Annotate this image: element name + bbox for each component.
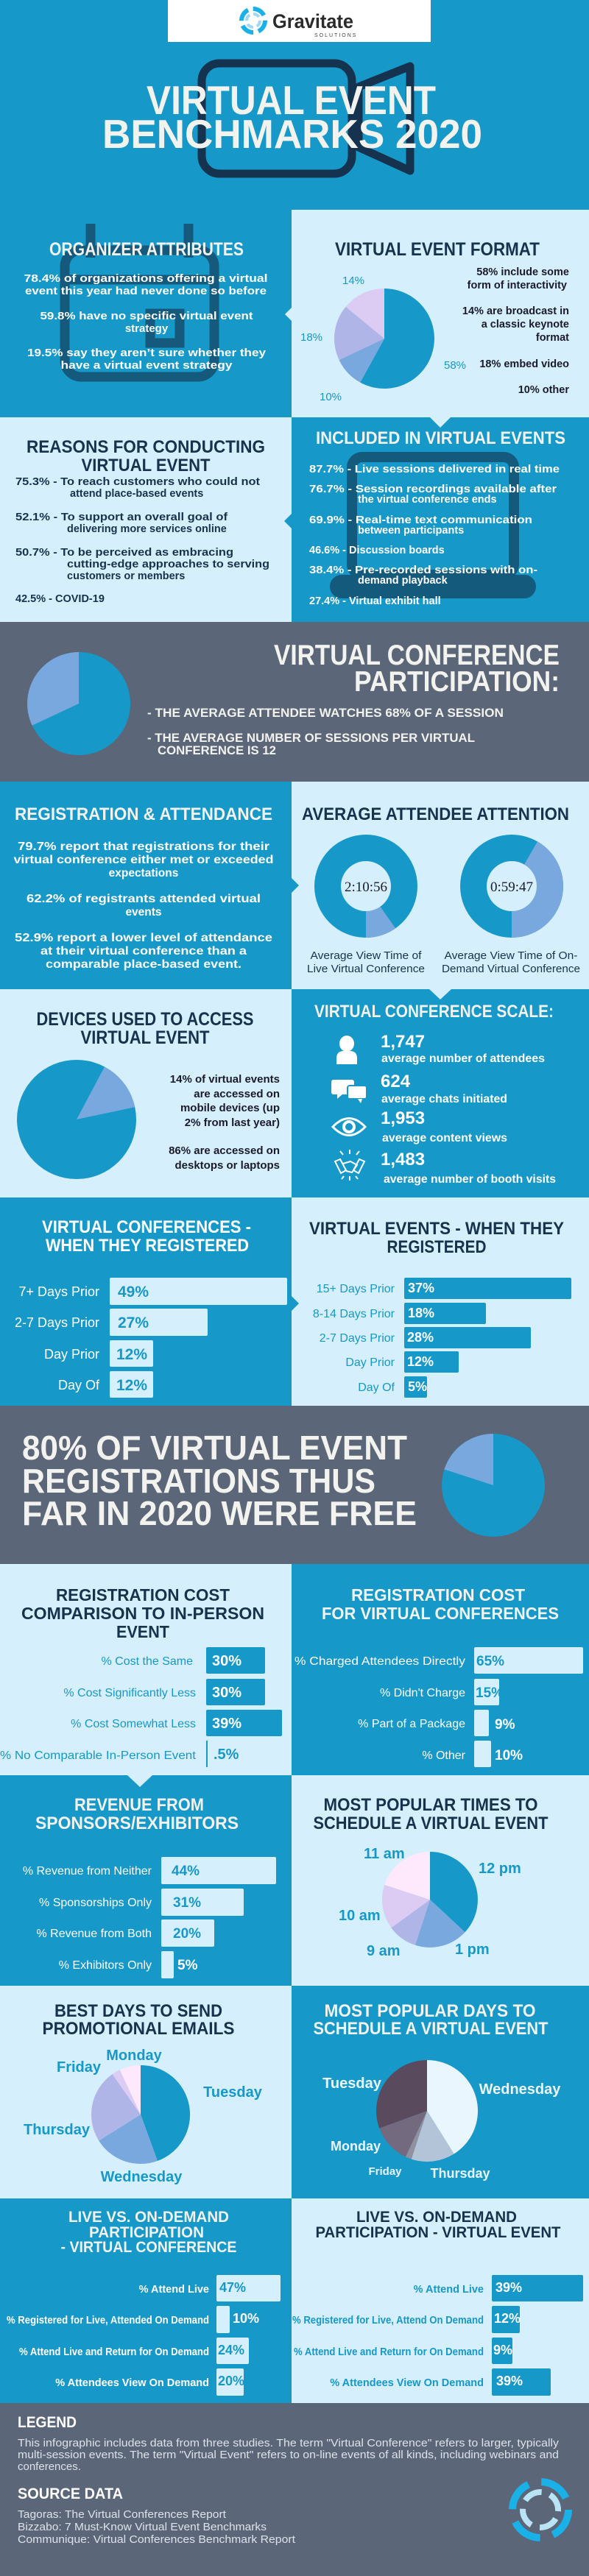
panel: average attendee attention: Demand Virtual Conference <box>442 963 580 975</box>
panel: organizer attributes: strategy <box>125 322 169 335</box>
bar chart: % Attendees View On Demand <box>330 2377 484 2389</box>
bar chart: 2-7 Days Prior <box>320 1332 395 1345</box>
panel: legend <box>18 2414 560 2473</box>
bar chart: % Registered for Live, Attend On Demand <box>292 2315 484 2326</box>
panel: source data: Communique: Virtual Conferences Benchmark Report <box>18 2533 296 2546</box>
bar chart: 10% <box>495 1748 523 1763</box>
panel: registration & attendance: REGISTRATION & ATTENDANCE <box>15 804 272 824</box>
donut: live <box>314 835 417 938</box>
title <box>102 77 482 157</box>
bar chart: 30% <box>212 1685 241 1701</box>
bar chart: % Exhibitors Only <box>59 1959 152 1972</box>
panel: live vs on-demand conference: LIVE VS. ON-DEMAND <box>68 2209 229 2226</box>
bar chart: % Registered for Live, Attended On Demand <box>7 2315 209 2326</box>
icon: laptop <box>335 457 531 593</box>
panel: reasons for conducting: 75.3% - To reach customers who could not <box>15 476 260 488</box>
panel: reasons for conducting: attend place-based events <box>70 488 203 500</box>
panel: live vs on-demand event: LIVE VS. ON-DEMAND <box>356 2209 517 2226</box>
panel: registration & attendance: comparable place-based event. <box>46 958 241 971</box>
bar chart: % Attend Live and Return for On Demand <box>294 2346 484 2358</box>
panel: virtual conference scale <box>314 1002 556 1186</box>
panel: virtual event format: form of interactivity <box>468 280 567 291</box>
bar chart: 9% <box>493 2343 512 2357</box>
panel: virtual conference scale: 1,747 <box>381 1032 425 1052</box>
panel: legend: This infographic includes data from three studies. The term "Virtual Conference" refers to larger, typically <box>18 2437 560 2449</box>
bar chart: 65% <box>476 1654 504 1669</box>
icon: gravitate logo <box>241 9 265 32</box>
panel: virtual event format: 58% include some <box>476 266 569 278</box>
panel: legend: LEGEND <box>18 2414 77 2431</box>
bar chart: Day Prior <box>345 1356 395 1369</box>
panel: virtual conferences when registered <box>15 1217 287 1398</box>
panel: virtual event format <box>300 239 569 403</box>
panel: average attendee attention: Live Virtual Conference <box>307 963 425 975</box>
panel: devices <box>17 1009 280 1179</box>
pie chart: best email days <box>91 2065 190 2164</box>
panel: virtual event format: 14% <box>342 275 364 287</box>
panel: most popular times: 12 pm <box>479 1861 521 1877</box>
panel: registration & attendance: virtual conference either met or exceeded <box>13 854 274 866</box>
bar chart: 39% <box>496 2374 523 2388</box>
bar chart: 28% <box>407 1330 434 1345</box>
panel: 80% free: FAR IN 2020 WERE FREE <box>22 1494 417 1532</box>
panel: live vs on-demand conference: - VIRTUAL CONFERENCE <box>60 2239 237 2256</box>
panel: virtual conference participation: CONFERENCE IS 12 <box>158 743 276 757</box>
panel: most popular times: SCHEDULE A VIRTUAL EVENT <box>314 1814 549 1833</box>
bar chart <box>15 1278 287 1398</box>
panel: most popular days: MOST POPULAR DAYS TO <box>324 2001 536 2021</box>
panel: included in virtual events <box>309 428 565 607</box>
panel: devices: 14% of virtual events <box>170 1073 280 1086</box>
panel: 80% free: 80% OF VIRTUAL EVENT <box>22 1429 407 1467</box>
panel: registration & attendance: events <box>125 906 162 919</box>
panel: virtual conference scale: VIRTUAL CONFERENCE SCALE: <box>314 1002 554 1022</box>
bar chart: 27% <box>118 1314 149 1331</box>
panel: legend: conferences. <box>18 2460 81 2473</box>
panel: live vs on-demand event <box>292 2209 583 2396</box>
panel: registration cost for virtual conferences: FOR VIRTUAL CONFERENCES <box>322 1604 559 1623</box>
title: BENCHMARKS 2020 <box>102 111 482 157</box>
bar chart: % Attend Live and Return for On Demand <box>19 2346 209 2358</box>
bar chart: % Attend Live <box>414 2284 484 2296</box>
panel: organizer attributes: ORGANIZER ATTRIBUTES <box>49 239 244 260</box>
panel: organizer attributes: event this year had never done so before <box>25 285 267 297</box>
panel: devices: VIRTUAL EVENT <box>81 1027 209 1048</box>
bar chart: 2-7 Days Prior <box>15 1315 99 1330</box>
bar chart: % Revenue from Neither <box>23 1865 152 1878</box>
bar chart: 20% <box>218 2374 244 2388</box>
panel: live vs on-demand conference: PARTICIPATION <box>89 2224 204 2241</box>
bar chart: 15+ Days Prior <box>317 1283 395 1295</box>
bar chart: 39% <box>495 2280 522 2295</box>
panel: live vs on-demand conference <box>7 2209 281 2396</box>
panel: reasons for conducting: cutting-edge approaches to serving <box>67 559 269 570</box>
pie chart: format <box>334 289 434 389</box>
panel: virtual conference scale: 1,953 <box>381 1108 425 1128</box>
panel: most popular days: Friday <box>368 2165 402 2178</box>
panel: virtual event format: a classic keynote <box>482 319 569 330</box>
panel: source data <box>18 2485 296 2546</box>
bar chart: 12% <box>116 1346 147 1363</box>
panel: best days for emails: Monday <box>106 2048 163 2064</box>
panel: reasons for conducting: 50.7% - To be perceived as embracing <box>15 547 233 559</box>
panel: average attendee attention: AVERAGE ATTENDEE ATTENTION <box>302 804 569 824</box>
panel: most popular days: Thursday <box>430 2166 490 2181</box>
bar chart: 5% <box>408 1379 427 1394</box>
panel: registration cost comparison: COMPARISON TO IN-PERSON <box>21 1604 264 1623</box>
panel: revenue from sponsors: REVENUE FROM <box>74 1795 204 1815</box>
panel: virtual conference participation: PARTICIPATION: <box>354 666 560 698</box>
bar chart: % Cost the Same <box>102 1655 193 1668</box>
panel: included in virtual events: 87.7% - Live sessions delivered in real time <box>309 464 560 475</box>
bar chart: 12% <box>494 2311 521 2326</box>
panel: registration & attendance: at their virtual conference than a <box>40 945 247 958</box>
pie chart: 80% free <box>442 1434 545 1537</box>
panel: virtual event format: 14% are broadcast in <box>462 305 569 317</box>
panel: best days for emails <box>24 2001 263 2185</box>
bar chart: 47% <box>219 2280 246 2295</box>
bar chart: % Attend Live <box>139 2284 209 2296</box>
bar chart: % Sponsorships Only <box>39 1897 152 1909</box>
panel: virtual conference scale: average number of booth visits <box>384 1173 556 1186</box>
panel: average attendee attention: Average View Time of <box>311 950 423 962</box>
icon: eye <box>333 1119 365 1135</box>
panel: organizer attributes: have a virtual event strategy <box>60 359 233 372</box>
bar chart: 44% <box>172 1864 200 1879</box>
panel: source data: Bizzabo: 7 Must-Know Virtual Event Benchmarks <box>18 2521 267 2533</box>
bar chart: 24% <box>218 2343 244 2357</box>
panel: most popular times: MOST POPULAR TIMES TO <box>324 1795 537 1815</box>
bar chart: 8-14 Days Prior <box>313 1308 395 1320</box>
panel: devices: desktops or laptops <box>174 1159 280 1172</box>
panel: best days for emails: Tuesday <box>203 2084 263 2101</box>
panel: devices: 2% from last year) <box>185 1117 280 1129</box>
panel: devices: 86% are accessed on <box>169 1144 280 1157</box>
bar chart: 30% <box>212 1653 241 1669</box>
bar chart: 37% <box>408 1281 434 1295</box>
panel: registration & attendance <box>13 804 274 971</box>
panel: included in virtual events: 27.4% - Virtual exhibit hall <box>309 595 441 607</box>
bar chart <box>294 1647 583 1767</box>
bar chart: .5% <box>214 1747 239 1763</box>
panel: included in virtual events: 38.4% - Pre-recorded sessions with on- <box>309 565 537 576</box>
panel: registration & attendance: 62.2% of registrants attended virtual <box>27 893 261 905</box>
logo box <box>168 0 431 42</box>
panel: average attendee attention: Average View Time of On- <box>445 950 578 962</box>
icon: handshake <box>335 1150 364 1181</box>
panel: organizer attributes <box>24 224 268 377</box>
bar chart <box>0 1647 282 1767</box>
bar chart: 39% <box>212 1716 241 1732</box>
panel: reasons for conducting: delivering more services online <box>67 523 227 535</box>
bar chart: % Part of a Package <box>358 1718 465 1730</box>
panel: best days for emails: Wednesday <box>101 2169 183 2185</box>
panel: virtual conferences when registered: WHEN THEY REGISTERED <box>46 1236 249 1256</box>
bar chart: 18% <box>408 1306 434 1320</box>
panel: reasons for conducting <box>15 437 269 605</box>
panel: live vs on-demand event: PARTICIPATION - VIRTUAL EVENT <box>315 2224 561 2241</box>
panel: source data: Tagoras: The Virtual Conferences Report <box>18 2508 227 2521</box>
panel: organizer attributes: 59.8% have no specific virtual event <box>40 310 253 322</box>
bar chart: 12% <box>407 1354 434 1369</box>
bar chart: % Revenue from Both <box>36 1928 152 1940</box>
panel: most popular times: 9 am <box>367 1943 401 1959</box>
panel: virtual event format: format <box>536 332 569 344</box>
panel: best days for emails: PROMOTIONAL EMAILS <box>43 2019 234 2039</box>
panel: virtual event format: 10% <box>320 391 342 403</box>
panel: reasons for conducting: REASONS FOR CONDUCTING <box>27 437 265 457</box>
panel: included in virtual events: between participants <box>358 525 464 537</box>
panel: devices: DEVICES USED TO ACCESS <box>37 1009 253 1030</box>
panel: virtual event format: 58% <box>444 359 466 372</box>
bar chart: % Cost Significantly Less <box>63 1687 196 1699</box>
icon: calendar <box>65 224 214 377</box>
panel: best days for emails: BEST DAYS TO SEND <box>54 2001 222 2021</box>
panel: virtual conference scale: 624 <box>381 1072 411 1091</box>
panel: reasons for conducting: customers or members <box>67 570 185 582</box>
panel: revenue from sponsors: SPONSORS/EXHIBITORS <box>35 1814 239 1833</box>
logo box: SOLUTIONS <box>314 33 357 38</box>
panel: virtual conference participation: - THE AVERAGE NUMBER OF SESSIONS PER VIRTUAL <box>147 731 475 745</box>
donut: on-demand <box>460 835 563 938</box>
panel: reasons for conducting: 52.1% - To support an overall goal of <box>15 512 228 523</box>
bar chart <box>313 1278 571 1398</box>
bar chart: % Cost Somewhat Less <box>71 1718 196 1730</box>
panel: included in virtual events: INCLUDED IN VIRTUAL EVENTS <box>316 428 565 448</box>
panel: best days for emails: Friday <box>57 2059 102 2076</box>
panel: most popular days: SCHEDULE A VIRTUAL EVENT <box>314 2019 549 2039</box>
panel: virtual events when registered: VIRTUAL EVENTS - WHEN THEY <box>309 1219 564 1239</box>
icon: gravitate logo bottom <box>512 2482 568 2538</box>
panel: virtual conferences when registered: VIRTUAL CONFERENCES - <box>42 1217 251 1237</box>
panel: virtual event format: 18% <box>300 331 322 344</box>
panel: included in virtual events: 76.7% - Session recordings available after <box>309 484 557 495</box>
panel: registration cost for virtual conferences <box>294 1585 583 1767</box>
panel: organizer attributes: 78.4% of organizations offering a virtual <box>24 272 268 285</box>
bar chart: % Charged Attendees Directly <box>294 1655 465 1668</box>
panel: registration cost comparison <box>0 1585 282 1767</box>
notches <box>127 308 451 1787</box>
panel: most popular times: 11 am <box>364 1846 405 1862</box>
panel: devices: mobile devices (up <box>180 1102 280 1114</box>
panel: reasons for conducting: 42.5% - COVID-19 <box>15 593 105 605</box>
panel: most popular times <box>314 1795 549 1959</box>
panel: registration & attendance: 52.9% report a lower level of attendance <box>15 932 272 944</box>
panel: virtual conference participation: - THE AVERAGE ATTENDEE WATCHES 68% OF A SESSION <box>147 706 504 720</box>
panel: registration cost for virtual conferences: REGISTRATION COST <box>351 1585 525 1604</box>
pie chart: 68% watched <box>27 652 130 755</box>
panel: most popular days <box>314 2001 561 2181</box>
bar chart <box>23 1857 276 1978</box>
panel: most popular times: 10 am <box>339 1908 381 1924</box>
panel: virtual event format: 18% embed video <box>479 358 569 370</box>
panel: registration & attendance: expectations <box>109 867 178 880</box>
panel: included in virtual events: 46.6% - Discussion boards <box>309 545 445 556</box>
bar chart: 10% <box>233 2311 259 2326</box>
panel: most popular days: Tuesday <box>322 2076 382 2092</box>
title: VIRTUAL EVENT <box>147 77 436 123</box>
panel: included in virtual events: the virtual conference ends <box>358 494 497 506</box>
panel: devices: are accessed on <box>194 1088 280 1100</box>
bar chart: Day Of <box>58 1378 100 1393</box>
panel: included in virtual events: demand playback <box>358 575 448 587</box>
bar chart: % No Comparable In-Person Event <box>0 1749 197 1762</box>
donut: live: 2:10:56 <box>345 880 387 895</box>
panel: most popular times: 1 pm <box>455 1942 490 1958</box>
panel: virtual conference scale: average content views <box>382 1132 507 1144</box>
logo box: Gravitate <box>272 10 353 32</box>
bar chart <box>292 2275 583 2396</box>
pie chart: event days <box>376 2060 478 2162</box>
icon: chat bubbles <box>331 1080 367 1103</box>
bar chart: 12% <box>116 1377 147 1394</box>
panel: 80% free <box>22 1429 545 1537</box>
panel: virtual events when registered: REGISTERED <box>387 1237 486 1257</box>
bar chart: % Other <box>422 1749 466 1762</box>
pie chart: times <box>382 1852 478 1947</box>
panel: average attendee attention <box>302 804 580 975</box>
panel: best days for emails: Thursday <box>24 2122 91 2138</box>
icon: video camera <box>202 63 410 174</box>
bar chart: 5% <box>177 1958 198 1973</box>
panel: virtual event format: 10% other <box>518 384 569 396</box>
bar chart: 31% <box>173 1895 201 1911</box>
panel: registration cost comparison: EVENT <box>116 1622 169 1641</box>
bar chart: 15% <box>476 1685 504 1701</box>
bar chart: Day Prior <box>44 1347 99 1362</box>
donut: on-demand: 0:59:47 <box>490 880 533 895</box>
panel: registration cost comparison: REGISTRATION COST <box>56 1585 230 1604</box>
panel: virtual conference participation <box>27 640 560 757</box>
panel: virtual conference scale: average chats initiated <box>381 1093 507 1105</box>
bar chart: Day Of <box>358 1381 395 1394</box>
icon: person <box>336 1036 357 1064</box>
panel: virtual events when registered <box>309 1219 571 1398</box>
panel: revenue from sponsors <box>23 1795 276 1978</box>
panel: virtual conference scale: 1,483 <box>381 1150 425 1170</box>
pie chart: devices <box>17 1060 136 1179</box>
bar chart: 7+ Days Prior <box>18 1284 99 1299</box>
panel: most popular days: Wednesday <box>479 2081 561 2098</box>
bar chart: 20% <box>173 1926 201 1942</box>
panel: virtual event format: VIRTUAL EVENT FORMAT <box>335 239 540 260</box>
bar chart <box>7 2275 281 2396</box>
panel: virtual conference scale: average number of attendees <box>381 1052 545 1065</box>
panel: registration & attendance: 79.7% report that registrations for their <box>18 841 269 853</box>
panel: organizer attributes: 19.5% say they aren’t sure whether they <box>27 347 267 359</box>
bar chart: 9% <box>495 1717 515 1733</box>
bar chart: % Didn't Charge <box>380 1687 465 1699</box>
panel: most popular days: Monday <box>331 2139 381 2154</box>
panel: legend: multi-session events. The term "Virtual Event" refers to on-line events of all kinds, including webinars and <box>18 2449 559 2461</box>
panel: included in virtual events: 69.9% - Real-time text communication <box>309 514 532 526</box>
panel: reasons for conducting: VIRTUAL EVENT <box>81 456 211 475</box>
bar chart: % Attendees View On Demand <box>55 2377 209 2389</box>
panel: 80% free: REGISTRATIONS THUS <box>22 1462 375 1500</box>
bar chart: 49% <box>118 1284 149 1301</box>
panel: source data: SOURCE DATA <box>18 2485 123 2502</box>
